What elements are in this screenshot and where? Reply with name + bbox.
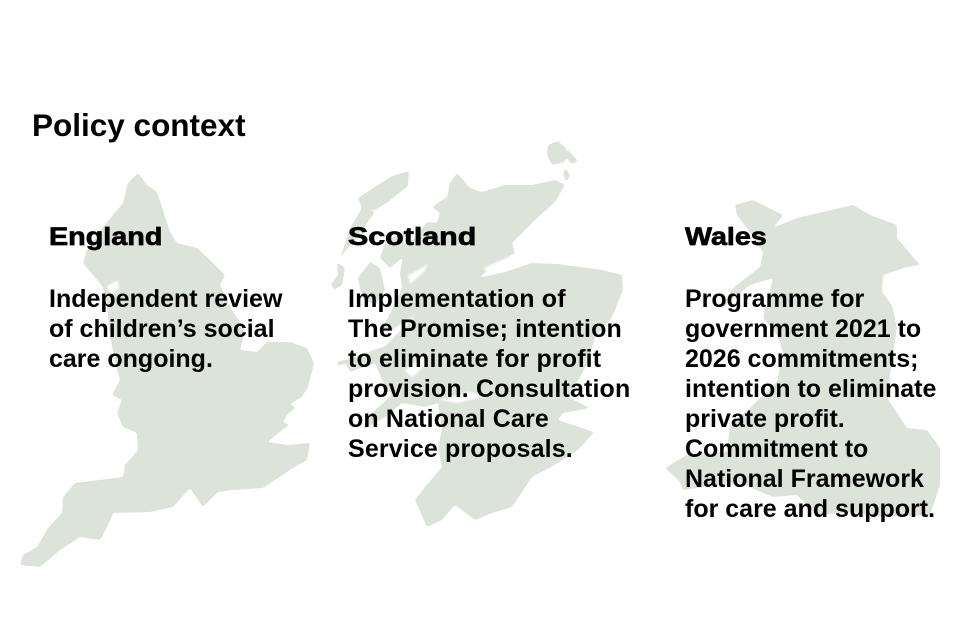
text: Scotland policy: to eliminate for profit <box>348 345 601 373</box>
text: Wales policy: 2026 commitments; <box>685 345 918 373</box>
text: Wales policy: private profit. <box>685 405 845 433</box>
text: Scotland policy: provision. Consultation <box>348 375 630 403</box>
heading: Wales: Wales <box>685 223 767 251</box>
text: England policy <box>49 285 282 373</box>
text: Wales policy <box>685 285 936 523</box>
text: Wales policy: Programme for <box>685 285 864 313</box>
text: Scotland policy: Service proposals. <box>348 435 573 463</box>
text: England policy: care ongoing. <box>49 345 213 373</box>
map: England <box>20 173 314 567</box>
text: Scotland policy: Implementation of <box>348 285 566 313</box>
title: Policy context <box>32 107 246 143</box>
text: Wales policy: for care and support. <box>685 495 935 523</box>
text: Wales policy: National Framework <box>685 465 924 493</box>
map: Wales <box>665 200 940 517</box>
map: Scotland <box>331 141 623 527</box>
text: Wales policy: government 2021 to <box>685 315 921 343</box>
heading: England: England <box>49 223 162 251</box>
heading: Scotland: Scotland <box>348 223 476 251</box>
text: England policy: Independent review <box>49 285 282 313</box>
text: Scotland policy: The Promise; intention <box>348 315 622 343</box>
text: Scotland policy: on National Care <box>348 405 549 433</box>
text: England policy: of children’s social <box>49 315 275 343</box>
text: Scotland policy <box>348 285 630 463</box>
text: Wales policy: intention to eliminate <box>685 375 936 403</box>
text: Wales policy: Commitment to <box>685 435 868 463</box>
